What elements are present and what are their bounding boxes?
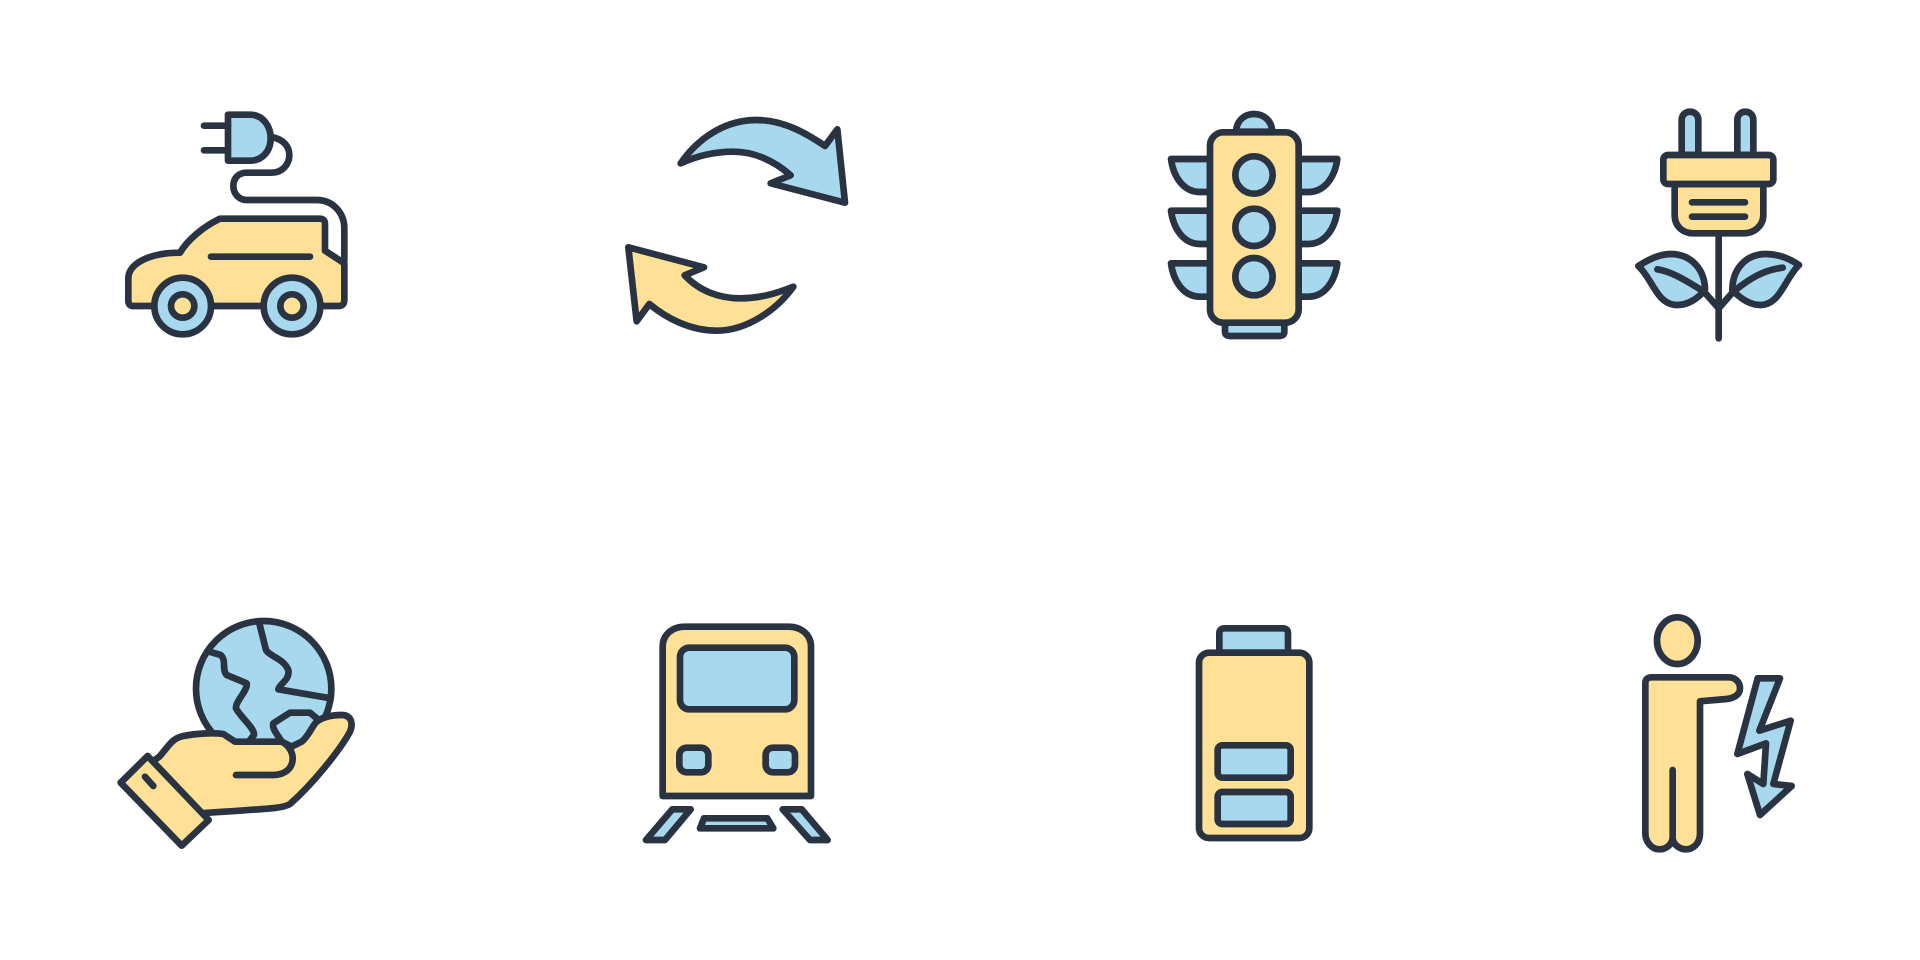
icon: recycling arrows xyxy=(628,120,845,331)
icon: traffic light xyxy=(1171,114,1337,336)
icon: train front xyxy=(646,627,828,840)
icon: electric car with plug xyxy=(128,115,344,334)
icon: person with lightning bolt xyxy=(1645,617,1792,849)
icon: battery low xyxy=(1199,628,1309,838)
icon: hand holding globe xyxy=(121,621,352,846)
icon: plug with leaves xyxy=(1638,112,1799,338)
